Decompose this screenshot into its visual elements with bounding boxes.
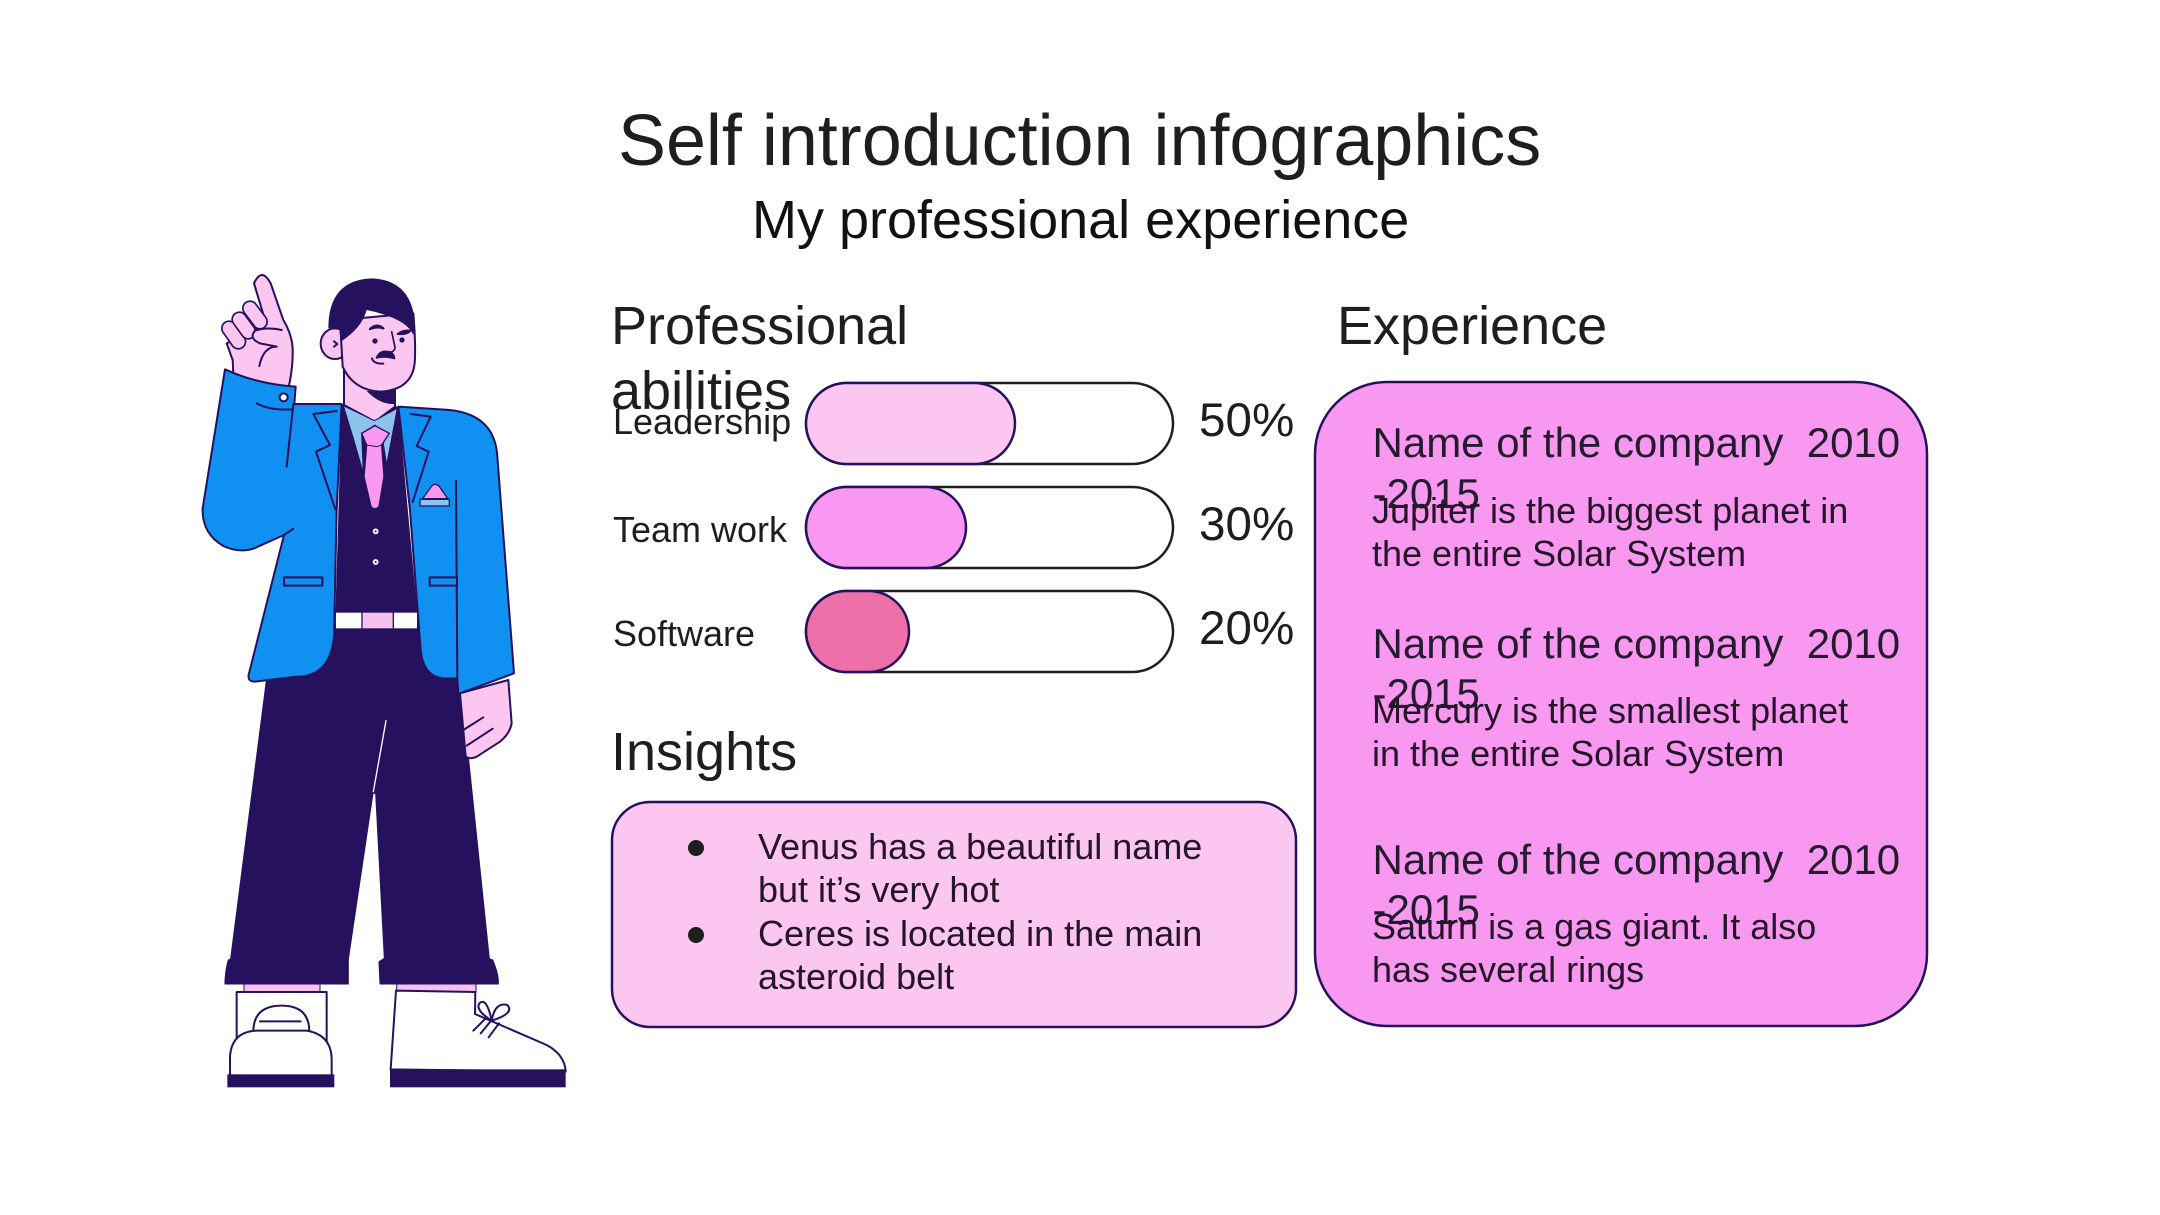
experience entry 2: Name of the company 2010: [1372, 620, 1900, 667]
experience entry 1: [1372, 419, 1900, 574]
skill row: team work: [613, 487, 1294, 568]
panel: insights: asteroid belt: [758, 956, 954, 997]
tie: [362, 426, 389, 509]
jacket left with sleeve: [203, 369, 342, 682]
skill row: leadership: 50%: [1199, 394, 1294, 447]
experience entry 3: -2015: [1372, 886, 1480, 933]
experience entry 3: Name of the company 2010: [1372, 836, 1900, 883]
skill row: leadership: Leadership: [613, 401, 791, 442]
experience entry 1: Name of the company 2010: [1372, 419, 1900, 466]
experience entry 1: -2015: [1372, 470, 1480, 517]
heading: insights: Insights: [611, 722, 797, 782]
heading: professional abilities: Professional: [611, 296, 908, 356]
skill row: software: [613, 591, 1294, 672]
belt: [336, 613, 361, 628]
vest: [297, 404, 458, 697]
skill row: leadership: [613, 383, 1294, 464]
experience entry 2: Mercury is the smallest planet: [1372, 690, 1848, 731]
panel: insights: Venus has a beautiful name: [758, 826, 1202, 867]
panel: experience: [1315, 382, 1927, 1026]
panel: insights: Ceres is located in the main: [758, 913, 1202, 954]
hair: [328, 278, 415, 342]
jacket right with sleeve: [398, 407, 514, 694]
experience entry 2: -2015: [1372, 670, 1480, 717]
illustration: businessman pointing up: [203, 275, 566, 1087]
trousers and shoes: [225, 660, 566, 1087]
experience entry 2: in the entire Solar System: [1372, 733, 1784, 774]
upper body: [203, 275, 514, 697]
experience entry 1: the entire Solar System: [1372, 533, 1746, 574]
experience entry 3: has several rings: [1372, 949, 1644, 990]
lower hand: [460, 680, 512, 758]
title: Self introduction infographics: [618, 101, 1541, 181]
panel: insights: [612, 802, 1296, 1027]
collar: [343, 406, 397, 473]
pocket square: [423, 484, 448, 499]
ear: [321, 328, 349, 359]
face: [340, 313, 415, 392]
jacket details: [257, 403, 457, 679]
experience entry 3: [1372, 836, 1900, 990]
facial features: [370, 326, 383, 329]
vest buttons: [373, 529, 378, 534]
experience entry 2: [1372, 620, 1900, 774]
neck: [344, 367, 395, 422]
skill row: software: 20%: [1199, 602, 1294, 655]
panel: insights: but it’s very hot: [758, 869, 999, 910]
heading: professional abilities: abilities: [611, 361, 791, 421]
experience entry 3: Saturn is a gas giant. It also: [1372, 906, 1816, 947]
raised hand: [227, 275, 293, 388]
subtitle: My professional experience: [752, 190, 1409, 250]
skill row: team work: Team work: [613, 509, 788, 550]
skill row: team work: 30%: [1199, 498, 1294, 551]
experience entry 1: Jupiter is the biggest planet in: [1372, 490, 1848, 531]
heading: experience: Experience: [1337, 296, 1607, 356]
skill row: software: Software: [613, 613, 755, 654]
